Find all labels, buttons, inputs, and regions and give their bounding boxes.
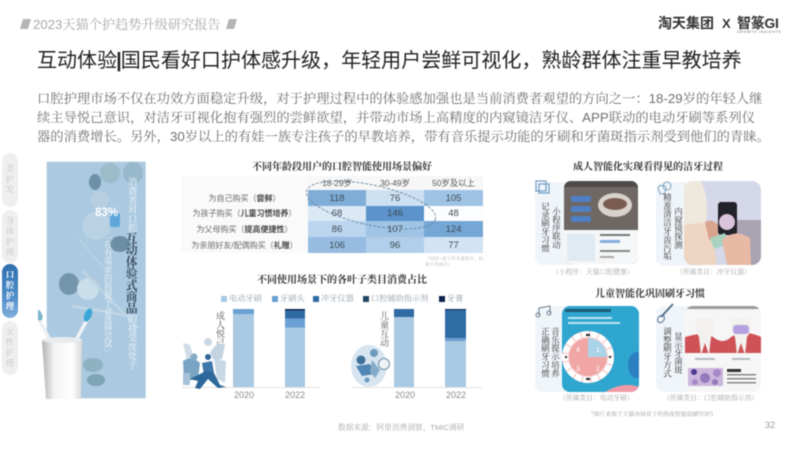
heat table: preferences by age: 48 bbox=[448, 208, 459, 219]
card text: 内窥镜探测 bbox=[673, 207, 683, 249]
logo: 淘天集团 x 智篆GI: 淘天集团 bbox=[658, 15, 714, 31]
heading: stacked bars: 不同使用场景下的各叶子类目消费占比 bbox=[257, 271, 427, 286]
caption: music prompt: （所属类目：电动牙刷） bbox=[559, 392, 634, 402]
caption: endoscope: （所属类目：冲牙仪器） bbox=[676, 266, 751, 276]
logo: 淘天集团 x 智篆GI: GROWTH INSIGHTS bbox=[737, 30, 781, 34]
tab: 口腔护理 active bbox=[2, 264, 18, 318]
heat table: preferences by age: 86 bbox=[332, 224, 342, 234]
panel: blue promo with toothbrush cup bbox=[37, 161, 146, 400]
card: endoscope: 精准清洁牙齿污垢 bbox=[662, 193, 672, 260]
card text: 小程序联动 bbox=[551, 207, 561, 249]
legend bbox=[220, 293, 464, 304]
tab: 身体护理: 身体护理 bbox=[4, 216, 16, 258]
card: endoscope bbox=[656, 180, 762, 266]
heading: heat table: 不同年龄段用户的口腔智能使用场景偏好 bbox=[252, 158, 432, 173]
card: mini program: 记录刷牙习惯 bbox=[540, 202, 550, 252]
heat table: preferences by age: 为孩子购买（ ） bbox=[192, 209, 296, 218]
card: mini program bbox=[534, 180, 639, 265]
tab: 口腔护理 active: 口腔护理 bbox=[4, 270, 16, 312]
tab: 身体护理 bbox=[2, 210, 18, 263]
heat table: preferences by age: 为亲朋好友/配偶购买（ ） bbox=[191, 240, 298, 250]
cells bbox=[308, 190, 366, 206]
caption: plaque indicator: （所属类目：口腔辅助指示剂） bbox=[663, 392, 758, 402]
table note: （50岁+孩子样本量较少，结果不作展开） bbox=[425, 256, 483, 268]
heat table: preferences by age: 50岁及以上 bbox=[432, 178, 475, 188]
card: music prompt: 3 bbox=[576, 366, 580, 373]
axis years: 2020 bbox=[395, 390, 415, 400]
vertical text: quote: 「在有需求的前提下会选择尝试」 bbox=[103, 232, 113, 356]
intro text: 器的消费增长。另外，30岁以上的有娃一族专注孩子的早教培养，带有音乐提示功能的牙刷和牙菌斑指示剂受到他们的青睐。 bbox=[37, 129, 770, 144]
axis years: 2022 bbox=[446, 390, 466, 400]
toothbrush cup bbox=[37, 308, 93, 400]
percentage callout: 83% bbox=[95, 207, 118, 219]
axis years bbox=[234, 390, 466, 400]
report header tag: 2023天猫个护趋势升级研究报告 bbox=[33, 17, 221, 32]
heat table: preferences by age: 105 bbox=[446, 192, 461, 204]
vertical text: acceptance: 消费者对口腔 互动体验式商品 的接受度处于 bbox=[124, 177, 140, 369]
heat table: preferences by age: 107 bbox=[387, 224, 403, 234]
logo: 淘天集团 x 智篆GI: X bbox=[722, 16, 731, 31]
heat table: preferences by age: 礼赠 bbox=[274, 240, 290, 250]
heat table: preferences by age: 68 bbox=[332, 208, 342, 219]
illustration: adults bbox=[182, 338, 226, 390]
background illustration bbox=[46, 161, 146, 399]
title: 互动体验|国民看好口护体感升级，年轻用户尝鲜可视化，熟龄群体注重早教培养 bbox=[37, 50, 742, 72]
heat table: preferences by age: 儿童习惯培养 bbox=[240, 209, 288, 218]
heat table: preferences by age: 96 bbox=[390, 240, 400, 250]
legend: 牙刷头 bbox=[280, 293, 305, 304]
card: music prompt: 正确刷牙习惯 bbox=[540, 327, 550, 377]
heat table: preferences by age: 76 bbox=[390, 192, 400, 204]
legend: 牙膏 bbox=[447, 293, 463, 304]
source note: 数据来源：阿里消费洞察、TMIC调研 bbox=[338, 423, 464, 432]
heat table: preferences by age bbox=[191, 178, 484, 254]
card: music prompt bbox=[534, 304, 640, 393]
legend: 冲牙仪器 bbox=[321, 293, 354, 304]
axis years: 2022 bbox=[285, 390, 305, 400]
intro text bbox=[37, 91, 770, 144]
column headers bbox=[308, 176, 366, 190]
tab: 女性护理 bbox=[2, 321, 18, 375]
label: 儿童互动: 儿童互动 bbox=[379, 311, 389, 347]
illustration: children circle bbox=[350, 344, 391, 388]
row labels: 为自己购买（ ） bbox=[208, 194, 280, 202]
caption: mini program: （小程序：天猫口腔健康） bbox=[552, 266, 634, 276]
heat table: preferences by age: 124 bbox=[446, 224, 461, 234]
tab: 美护发: 美护发 bbox=[4, 164, 16, 196]
intro text: 续主导悦己意识，对洁牙可视化抱有强烈的尝鲜欲望，并带动市场上高精度的内窥镜洁牙仪、APP联动的电动牙刷等系列仪 bbox=[37, 110, 755, 125]
card: music prompt: 4 bbox=[576, 347, 580, 354]
heading: adult smart brushing: 成人智能化实现看得见的洁牙过程 bbox=[573, 158, 723, 173]
tab: 女性护理: 女性护理 bbox=[4, 327, 16, 369]
card: music prompt: 2 bbox=[596, 366, 600, 373]
heat table: preferences by age: 146 bbox=[387, 208, 403, 219]
card: plaque indicator: 调整刷牙方式 bbox=[662, 327, 672, 377]
heading: child smart brushing: 儿童智能化巩固刷牙习惯 bbox=[595, 285, 705, 300]
card text: 显示牙菌斑 bbox=[673, 332, 683, 374]
dashed ellipse highlight bbox=[305, 180, 437, 230]
row labels bbox=[181, 190, 308, 206]
row labels: 尝鲜 bbox=[256, 194, 272, 202]
intro text: 口腔护理市场不仅在功效方面稳定升级，对于护理过程中的体验感加强也是当前消费者观望的方向之一：18-29岁的年轻人继 bbox=[37, 91, 762, 106]
label: 成人悦己: 成人悦己 bbox=[215, 311, 225, 347]
page number: 32 bbox=[765, 420, 775, 430]
heat table: preferences by age: 106 bbox=[329, 240, 345, 250]
axis years: 2020 bbox=[234, 390, 254, 400]
card text: 音乐提示培养 bbox=[550, 327, 560, 377]
cells: 118 bbox=[329, 192, 345, 204]
legend: 口腔辅助指示剂 bbox=[371, 293, 428, 304]
heat table: preferences by age: 77 bbox=[448, 240, 459, 250]
legend: 电动牙刷 bbox=[229, 293, 262, 304]
side navigation tabs bbox=[1, 153, 19, 375]
footnote: *图片来源于天猫各场景下的热度智能混刷TOP3 bbox=[591, 409, 713, 418]
card: plaque indicator bbox=[656, 303, 762, 392]
logo: 淘天集团 x 智篆GI bbox=[658, 14, 781, 34]
heat table: preferences by age: 30-49岁 bbox=[380, 178, 410, 188]
heat table: preferences by age: 为父母购买（ ） bbox=[196, 224, 292, 234]
logo: 淘天集团 x 智篆GI: 智篆GI bbox=[737, 15, 779, 31]
card: music prompt: 1 bbox=[596, 347, 600, 354]
column headers: 18-29岁 bbox=[322, 178, 352, 188]
heat table: preferences by age: 提高便捷性 bbox=[244, 224, 284, 234]
tab: 美护发 bbox=[2, 153, 18, 207]
